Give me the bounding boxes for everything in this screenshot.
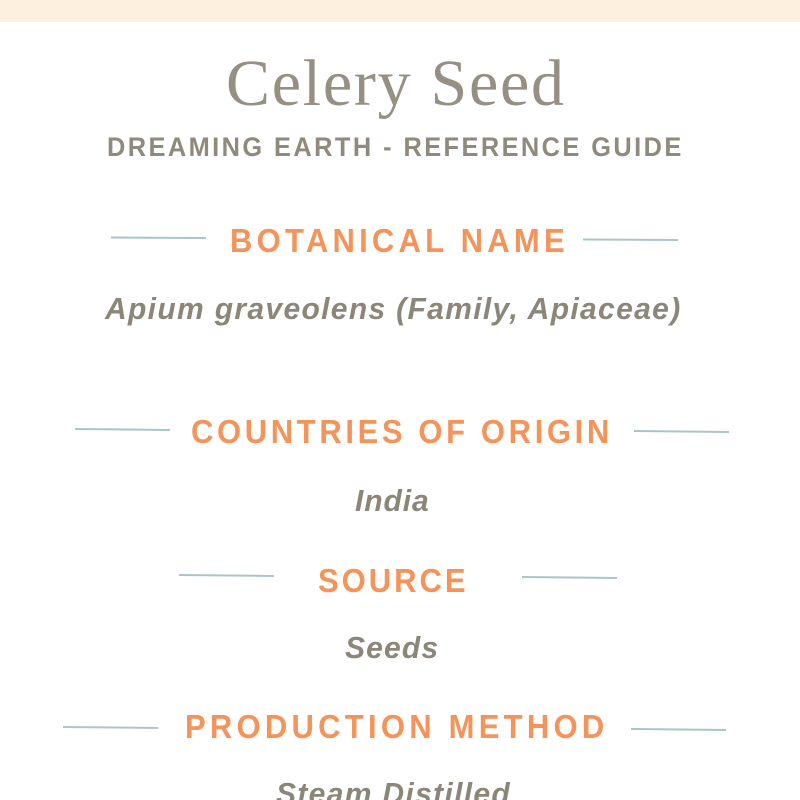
value: source: Seeds (345, 631, 438, 665)
section: countries of origin (75, 413, 729, 518)
section: botanical name (104, 222, 680, 326)
title: Celery Seed (226, 47, 564, 120)
section: source (179, 562, 617, 665)
heading: source: SOURCE (318, 562, 466, 599)
heading: countries of origin: COUNTRIES OF ORIGIN (191, 413, 609, 450)
subtitle: DREAMING EARTH - REFERENCE GUIDE (107, 131, 681, 162)
value: countries of origin: India (355, 484, 429, 518)
heading: production method: PRODUCTION METHOD (185, 708, 604, 745)
top cream band (0, 0, 800, 22)
heading: botanical name: BOTANICAL NAME (230, 222, 565, 259)
value: botanical name: Apium graveolens (Family, Apiaceae) (104, 292, 680, 326)
section: production method (63, 708, 726, 800)
